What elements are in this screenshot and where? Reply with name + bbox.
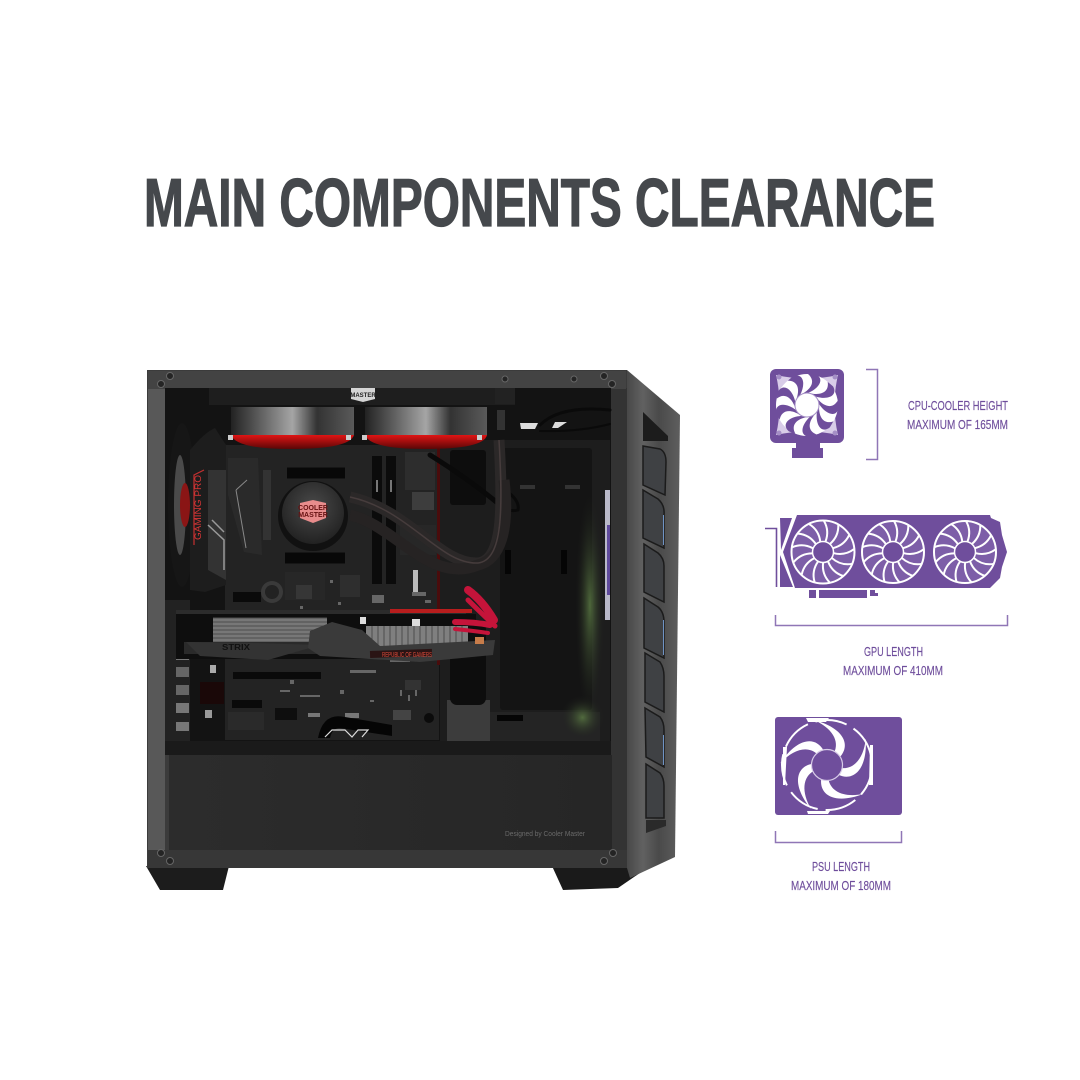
top frame edge	[148, 371, 626, 389]
upper cable bundle	[430, 409, 610, 511]
icon: gpu	[765, 515, 1007, 598]
bottom frame bar	[148, 850, 627, 868]
bottom shroud: Designed by Cooler Master	[505, 831, 586, 838]
gpu fans	[792, 520, 996, 584]
side gpu assembly	[168, 423, 226, 592]
bottom shroud	[165, 741, 612, 850]
label: gpu: GPU LENGTH	[864, 644, 923, 659]
icon: cpu cooler	[770, 369, 844, 458]
motherboard	[200, 445, 440, 740]
label: gpu	[843, 644, 943, 678]
horizontal gpu: REPUBLIC OF GAMERS	[382, 652, 432, 659]
top gap highlights	[520, 422, 567, 429]
cpu pump: COOLER	[298, 505, 328, 512]
back panel plate	[440, 440, 610, 745]
icon: psu	[775, 717, 902, 815]
logo badge	[350, 388, 376, 402]
bracket: gpu length	[776, 615, 1008, 626]
label: cpu cooler: CPU-COOLER HEIGHT	[908, 398, 1008, 413]
cpu pump: MASTER	[298, 512, 328, 519]
label: psu: PSU LENGTH	[812, 859, 870, 874]
label: psu	[791, 859, 891, 893]
top radiator bracket	[209, 388, 515, 405]
radiator fan right	[362, 407, 487, 449]
bracket: psu length	[776, 831, 902, 842]
expansion slot brackets	[165, 600, 190, 742]
side gpu assembly: GAMING PRO	[193, 475, 203, 540]
right frame edge	[610, 388, 627, 866]
vrm heatsink	[228, 458, 271, 555]
case frame	[147, 370, 627, 868]
cpu pump	[278, 473, 348, 558]
case feet	[146, 866, 650, 890]
label: gpu: MAXIMUM OF 410MM	[843, 663, 943, 678]
logo badge: MASTER	[350, 393, 376, 399]
pc case	[146, 370, 680, 890]
coolant tubes	[350, 388, 515, 569]
radiator fan left	[228, 407, 354, 449]
label: cpu cooler	[907, 398, 1008, 432]
left frame edge	[148, 372, 165, 867]
label: psu: MAXIMUM OF 180MM	[791, 878, 891, 893]
bracket: cpu cooler height	[866, 370, 878, 460]
red power cables	[455, 590, 495, 633]
label: cpu cooler: MAXIMUM OF 165MM	[907, 417, 1008, 432]
ram modules	[372, 456, 396, 584]
side front panel	[627, 370, 680, 878]
corner screws	[158, 372, 616, 864]
horizontal gpu	[176, 609, 495, 662]
interior	[165, 388, 611, 748]
horizontal gpu: STRIX	[222, 643, 251, 652]
